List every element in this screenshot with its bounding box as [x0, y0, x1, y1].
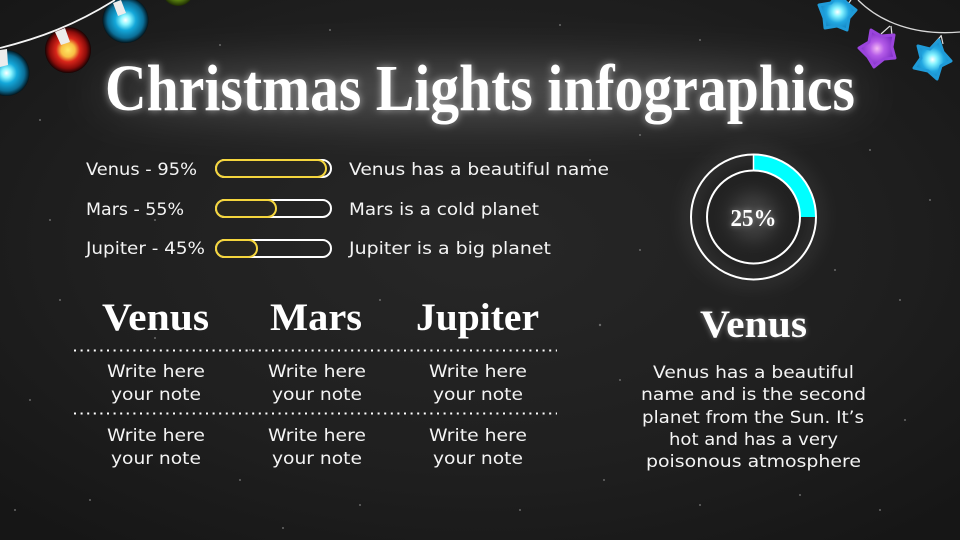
icon: blue star right	[914, 40, 951, 79]
note row 1: your note	[272, 385, 362, 405]
wire	[0, 0, 115, 48]
donut chart: 25%	[690, 153, 818, 281]
note row 1	[107, 362, 527, 405]
icon: bulb sockets	[0, 0, 126, 67]
column heading: Jupiter: Jupiter	[416, 296, 539, 339]
bar chart: planets	[85, 160, 609, 259]
note row 2: Write here	[429, 426, 527, 446]
note row 1: your note	[433, 385, 523, 405]
note row 2	[107, 426, 527, 469]
icon: blue bulb right	[102, 0, 148, 43]
note row 1: your note	[111, 385, 201, 405]
note row 2: your note	[433, 449, 523, 469]
note row 2: Write here	[268, 426, 366, 446]
bar row: Jupiter	[85, 239, 551, 259]
icon: green bulb	[162, 0, 194, 6]
bar row: Mars: Mars - 55%	[86, 200, 184, 220]
donut value: 25%	[730, 206, 776, 232]
icon: purple star	[859, 30, 895, 67]
icon: blue bulb left	[0, 50, 30, 96]
bar row: Mars: Mars is a cold planet	[349, 200, 539, 220]
note row 2: your note	[272, 449, 362, 469]
note row 1: Write here	[107, 362, 205, 382]
note row 1: Write here	[429, 362, 527, 382]
description text: poisonous atmosphere	[646, 452, 861, 472]
description text: name and is the second	[641, 385, 866, 405]
note row 1: Write here	[268, 362, 366, 382]
heading: Venus: Venus	[700, 303, 807, 346]
panel: Venus description	[641, 303, 866, 472]
icon: blue star top	[819, 0, 856, 30]
bar row: Venus: Venus - 95%	[86, 160, 197, 180]
note row 2: Write here	[107, 426, 205, 446]
bar row: Mars	[86, 200, 539, 220]
wire	[858, 0, 960, 33]
description text: planet from the Sun. It’s	[642, 408, 864, 428]
column heading: Venus: Venus	[102, 296, 209, 339]
description text: hot and has a very	[669, 430, 838, 450]
bar row: Jupiter: Jupiter is a big planet	[348, 239, 551, 259]
bar row: Jupiter: Jupiter - 45%	[85, 239, 205, 259]
bar row: Venus	[86, 160, 609, 180]
string of round lights	[0, 0, 194, 96]
description text	[641, 363, 866, 472]
string of star lights	[819, 0, 960, 79]
bar row: Venus: Venus has a beautiful name	[349, 160, 609, 180]
icon: star hooks	[848, 0, 943, 47]
icon: red bulb	[45, 27, 91, 73]
column heading: Mars: Mars	[270, 296, 362, 339]
description text: Venus has a beautiful	[653, 363, 854, 383]
note row 2: your note	[111, 449, 201, 469]
title: Christmas Lights infographics	[105, 52, 855, 125]
table of notes	[74, 296, 557, 469]
